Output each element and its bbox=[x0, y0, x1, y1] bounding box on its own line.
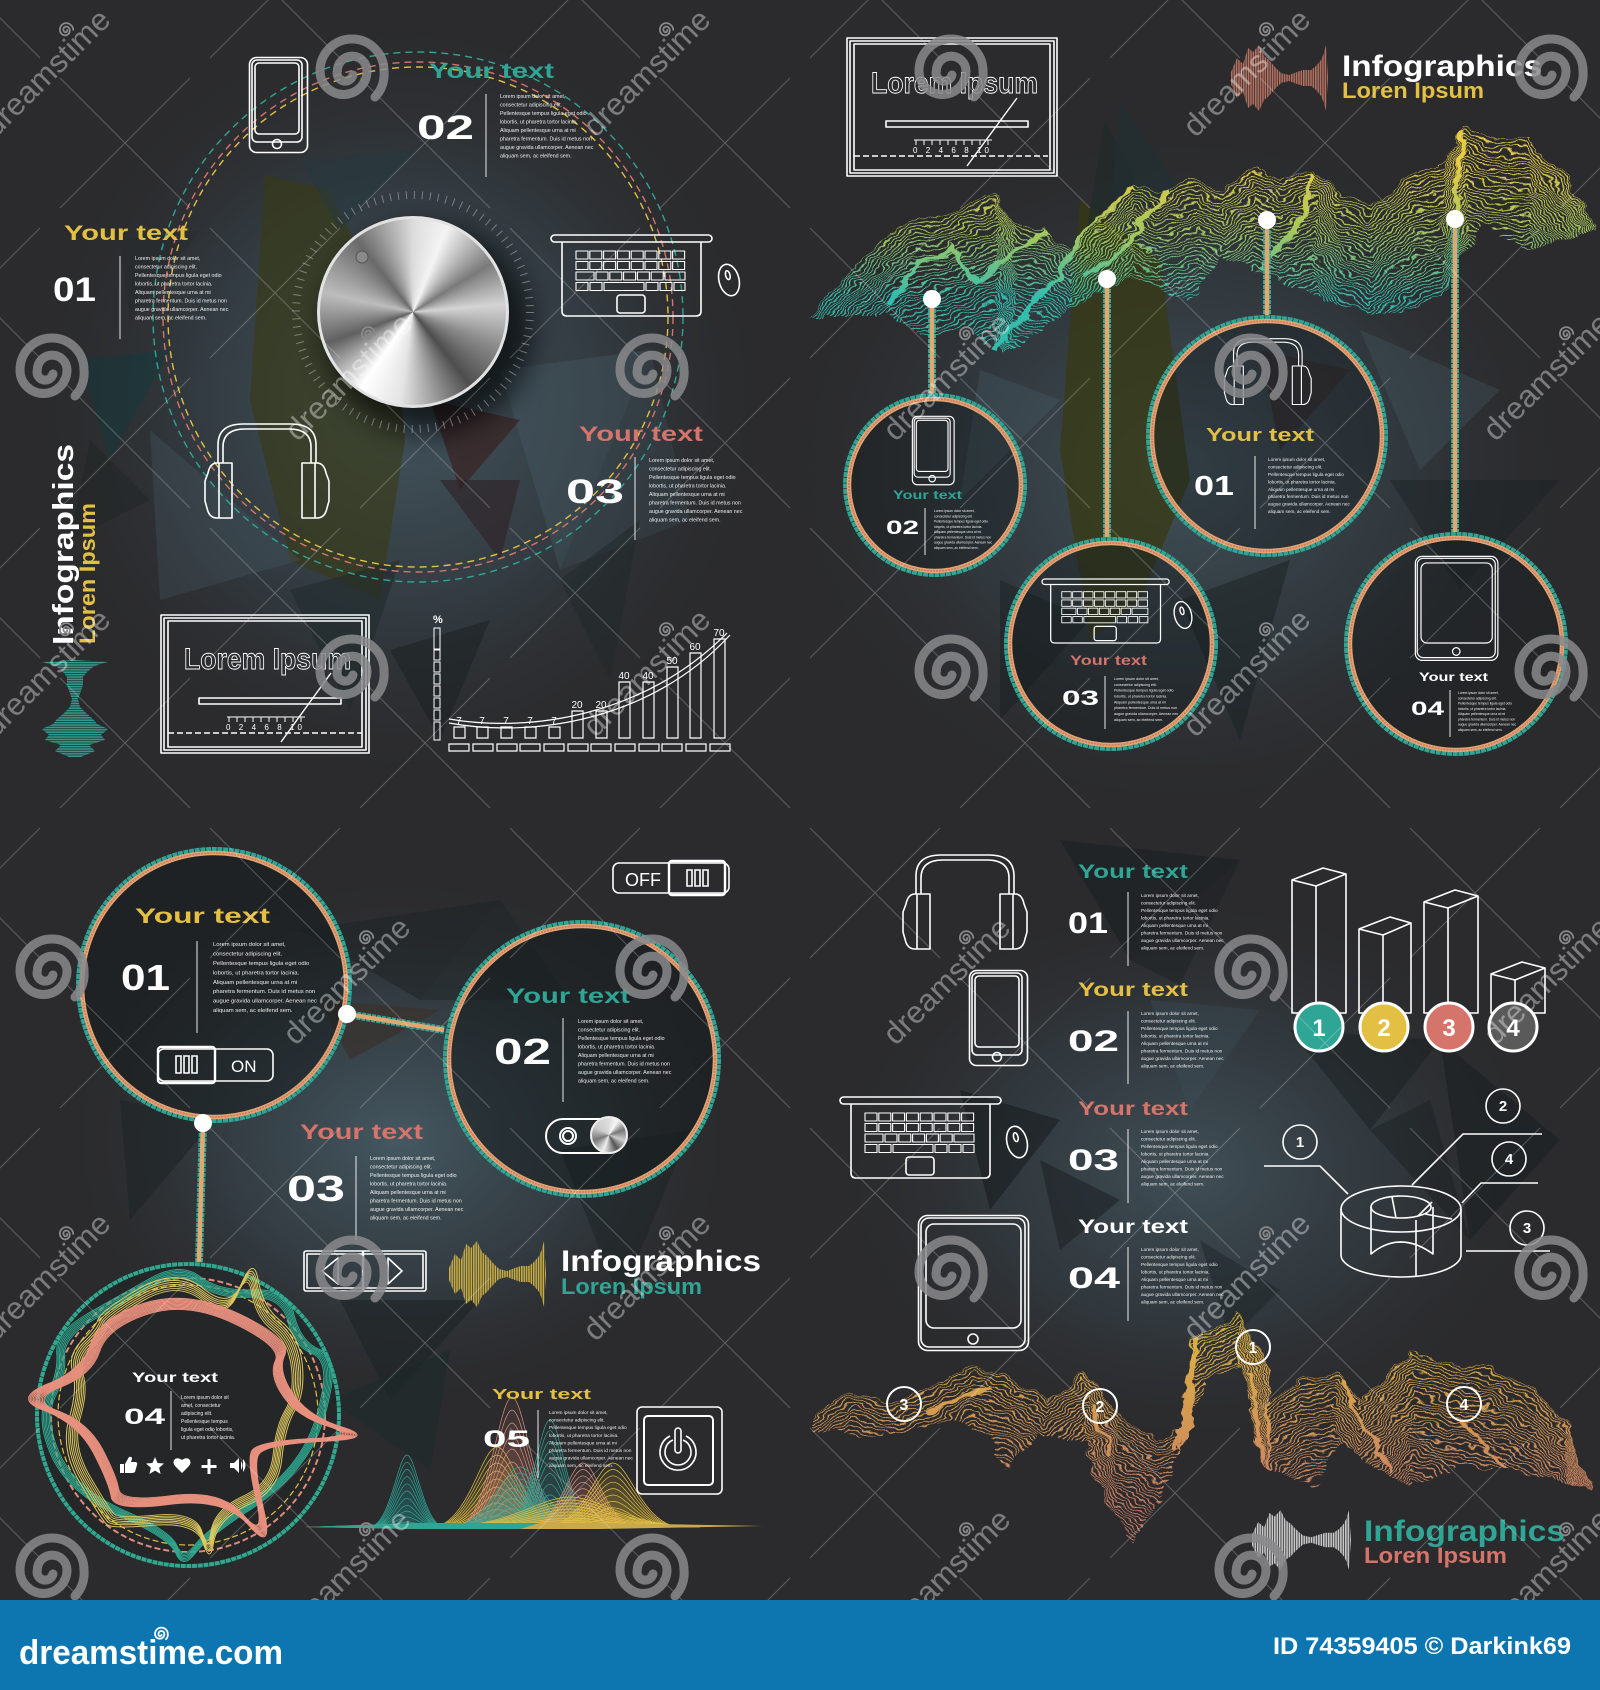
circle 02: lobortis, ut pharetra tortor lacinia. bbox=[934, 525, 982, 529]
block 03: consectetur adipiscing elit. bbox=[370, 1164, 432, 1170]
list item 01: aliquam sem, ac eleifend sem. bbox=[1141, 946, 1204, 951]
text block 02: lobortis, ut pharetra tortor lacinia. bbox=[500, 119, 577, 125]
bar chart: 7 bbox=[456, 716, 462, 727]
circle 02: augue gravida ullamcorper. Aenean nec bbox=[934, 541, 992, 545]
circle 04: 04 bbox=[1411, 699, 1445, 720]
list item 01: Lorem ipsum dolor sit amet, bbox=[1141, 893, 1199, 898]
meter box: 0 2 4 6 8 10 bbox=[226, 723, 303, 732]
list item 04: 04 bbox=[1068, 1262, 1120, 1295]
circle 01 bbox=[78, 849, 350, 1121]
title bbox=[1364, 1515, 1565, 1568]
circle 03: 03 bbox=[1062, 687, 1099, 710]
circle 03: lobortis, ut pharetra tortor lacinia. bbox=[1114, 695, 1167, 699]
list item 02: aliquam sem, ac eleifend sem. bbox=[1141, 1064, 1204, 1069]
circle 02: aliquam sem, ac eleifend sem. bbox=[934, 546, 979, 550]
text block 01: Pellentesque tempus ligula eget odio bbox=[135, 273, 222, 279]
toggle: OFF bbox=[613, 861, 729, 895]
bar chart: % bbox=[433, 614, 443, 626]
3D donut chart: 1 bbox=[1296, 1134, 1304, 1151]
circle 04 bbox=[1346, 534, 1566, 754]
list item 01: lobortis, ut pharetra tortor lacinia. bbox=[1141, 916, 1210, 921]
dashed rings bbox=[153, 52, 683, 582]
watermark text: dreamstime bbox=[876, 910, 1017, 1051]
circle 02: Lorem ipsum dolor sit amet, bbox=[934, 509, 975, 513]
wave markers: 4 bbox=[1460, 1397, 1469, 1414]
block 05: Aliquam pellentesque urna at mi bbox=[549, 1440, 617, 1446]
pins bbox=[923, 210, 1464, 308]
circle 04: Lorem ipsum dolor sit amet, bbox=[1458, 691, 1499, 695]
circle 01: 01 bbox=[1194, 470, 1234, 501]
circle 01: augue gravida ullamcorper. Aenean nec bbox=[1268, 502, 1350, 507]
connectors bbox=[932, 219, 1455, 537]
list item 03: consectetur adipiscing elit. bbox=[1141, 1137, 1196, 1142]
circle 01: 01 bbox=[121, 957, 170, 998]
icon: tablet bbox=[918, 1216, 1028, 1350]
peak chart bbox=[304, 1397, 764, 1529]
circle 02: pharetra fermentum. Duis id metus non bbox=[578, 1061, 670, 1067]
circle 04 with wave ribbon: Lorem ipsum dolor sit bbox=[181, 1395, 229, 1401]
text block 02: Lorem ipsum dolor sit amet, bbox=[500, 94, 565, 100]
list item 03: Pellentesque tempus ligula eget odio bbox=[1141, 1144, 1218, 1149]
circle 01: Aliquam pellentesque urna at mi bbox=[213, 980, 297, 986]
list item 02: Lorem ipsum dolor sit amet, bbox=[1141, 1011, 1199, 1016]
heading 01: Your text bbox=[64, 221, 188, 245]
title: Loren Ipsum bbox=[1364, 1543, 1507, 1568]
circle 04: pharetra fermentum. Duis id metus non bbox=[1458, 717, 1515, 721]
title: Infographics bbox=[1342, 50, 1542, 83]
circle 04: aliquam sem, ac eleifend sem. bbox=[1458, 728, 1503, 732]
toggle: ON bbox=[158, 1047, 273, 1083]
circle 04 with wave ribbon: Your text bbox=[132, 1370, 219, 1385]
text block 02: consectetur adipiscing elit. bbox=[500, 102, 562, 108]
list item 02: lobortis, ut pharetra tortor lacinia. bbox=[1141, 1034, 1210, 1039]
text block 03: Lorem ipsum dolor sit amet, bbox=[649, 458, 714, 464]
circle 02: pharetra fermentum. Duis id metus non bbox=[934, 535, 991, 539]
block 03: augue gravida ullamcorper. Aenean nec bbox=[370, 1207, 464, 1213]
list item 02 bbox=[1068, 980, 1224, 1084]
footer banner: dreamstime.com bbox=[19, 1634, 283, 1672]
block 03: Lorem ipsum dolor sit amet, bbox=[370, 1156, 435, 1162]
panel: top-left dial infographic bbox=[42, 52, 743, 757]
watermark text: dreamstime bbox=[276, 1502, 417, 1643]
title: Infographics bbox=[1364, 1515, 1565, 1548]
circle 02: consectetur adipiscing elit. bbox=[934, 514, 973, 518]
text block 03: Aliquam pellentesque urna at mi bbox=[649, 492, 725, 498]
connectors bbox=[199, 1014, 444, 1262]
list item 02: Your text bbox=[1078, 980, 1189, 1001]
list item 02: consectetur adipiscing elit. bbox=[1141, 1019, 1196, 1024]
toggle switch mini knob bbox=[590, 1116, 628, 1154]
list item 02: Aliquam pellentesque urna at mi bbox=[1141, 1041, 1208, 1046]
number 02: 02 bbox=[417, 109, 474, 147]
block 03: Pellentesque tempus ligula eget odio bbox=[370, 1173, 457, 1179]
list item 01: pharetra fermentum. Duis id metus non bbox=[1141, 931, 1223, 936]
text block 02: pharetra fermentum. Duis id metus non bbox=[500, 136, 592, 142]
number 01: 01 bbox=[53, 271, 96, 309]
list item 03: pharetra fermentum. Duis id metus non bbox=[1141, 1167, 1223, 1172]
bar chart: 60 bbox=[689, 642, 701, 653]
circle 02 bbox=[845, 395, 1025, 575]
bar chart: 40 bbox=[618, 671, 630, 682]
waveform: white bbox=[1252, 1510, 1351, 1570]
text block 01: pharetra fermentum. Duis id metus non bbox=[135, 298, 227, 304]
3D donut chart: 3 bbox=[1523, 1220, 1531, 1237]
waveform: coral bbox=[1231, 45, 1328, 111]
block 03: Your text bbox=[300, 1120, 423, 1144]
heading 02: Your text bbox=[429, 59, 554, 83]
meter box: Lorem Ipsum bbox=[184, 643, 351, 676]
bar chart: 70 bbox=[713, 628, 725, 639]
number 03: 03 bbox=[566, 473, 624, 511]
circle 02: Your text bbox=[506, 984, 630, 1008]
list item 01 bbox=[1068, 862, 1224, 966]
circle 03: Aliquam pellentesque urna at mi bbox=[1114, 700, 1166, 704]
text block 01: consectetur adipiscing elit. bbox=[135, 264, 197, 270]
circle 03: Lorem ipsum dolor sit amet, bbox=[1114, 677, 1159, 681]
circle 02: consectetur adipiscing elit. bbox=[578, 1027, 640, 1033]
block 05: aliquam sem, ac eleifend sem. bbox=[549, 1463, 613, 1469]
knob: brushed metal dial bbox=[317, 216, 509, 408]
circle 03 bbox=[1006, 539, 1216, 749]
circle 02: Pellentesque tempus ligula eget odio bbox=[578, 1036, 665, 1042]
circle 01: pharetra fermentum. Duis id metus non bbox=[1268, 494, 1349, 499]
circle 02: Aliquam pellentesque urna at mi bbox=[578, 1053, 654, 1059]
circle 01: Pellentesque tempus ligula eget odio bbox=[213, 961, 310, 967]
list item 04: Pellentesque tempus ligula eget odio bbox=[1141, 1262, 1218, 1267]
list item 04: lobortis, ut pharetra tortor lacinia. bbox=[1141, 1270, 1210, 1275]
circle 01: Your text bbox=[1206, 424, 1314, 445]
list item 04: Aliquam pellentesque urna at mi bbox=[1141, 1277, 1208, 1282]
icon: headphones bbox=[903, 855, 1027, 949]
circle 02: Aliquam pellentesque urna at mi bbox=[934, 530, 981, 534]
mesh wave: teal and yellow bbox=[810, 126, 1596, 352]
3D donut chart: 2 bbox=[1499, 1098, 1507, 1115]
circle 02: lobortis, ut pharetra tortor lacinia. bbox=[578, 1044, 655, 1050]
circle 01: aliquam sem, ac eleifend sem. bbox=[1268, 509, 1331, 514]
circle 02: 02 bbox=[494, 1031, 551, 1072]
panel: top-right terrain with hanging circles bbox=[800, 38, 1600, 754]
vertical title: Infographics bbox=[48, 444, 80, 645]
title: Infographics bbox=[561, 1245, 761, 1278]
list item 04: Lorem ipsum dolor sit amet, bbox=[1141, 1247, 1199, 1252]
title bbox=[561, 1245, 761, 1299]
list item 02: pharetra fermentum. Duis id metus non bbox=[1141, 1049, 1223, 1054]
text block 01: aliquam sem, ac eleifend sem. bbox=[135, 315, 207, 321]
text block 02: augue gravida ullamcorper. Aenean nec bbox=[500, 145, 594, 151]
bar chart: 20 bbox=[595, 700, 607, 711]
wave markers: 1 bbox=[1249, 1340, 1258, 1357]
circle 01: lobortis, ut pharetra tortor lacinia. bbox=[213, 970, 299, 976]
circle 03: Your text bbox=[1070, 653, 1148, 668]
title bbox=[1342, 50, 1542, 103]
meter box: Lorem Ipsum bbox=[871, 67, 1038, 100]
list item 01: Aliquam pellentesque urna at mi bbox=[1141, 923, 1208, 928]
text block 03: lobortis, ut pharetra tortor lacinia. bbox=[649, 483, 726, 489]
arrow slider bbox=[304, 1251, 426, 1291]
block 03: Aliquam pellentesque urna at mi bbox=[370, 1190, 446, 1196]
watermark text: dreamstime bbox=[276, 910, 417, 1051]
watermark text: dreamstime bbox=[876, 306, 1017, 447]
list item 03: Lorem ipsum dolor sit amet, bbox=[1141, 1129, 1199, 1134]
block 03 bbox=[287, 1120, 464, 1240]
power button bbox=[637, 1407, 722, 1494]
watermark text: dreamstime bbox=[576, 2, 717, 143]
3D donut chart bbox=[1264, 1089, 1550, 1277]
wave markers: 2 bbox=[1096, 1399, 1105, 1416]
circle 03: aliquam sem, ac eleifend sem. bbox=[1114, 718, 1163, 722]
icon: phone bbox=[250, 58, 308, 152]
circle 04 with wave ribbon: 04 bbox=[124, 1404, 166, 1429]
circle 04: augue gravida ullamcorper. Aenean nec bbox=[1458, 723, 1516, 727]
circle 01: Aliquam pellentesque urna at mi bbox=[1268, 487, 1334, 492]
list item 03: Your text bbox=[1078, 1099, 1189, 1120]
circle 04 with wave ribbon: adipiscing elit. bbox=[181, 1411, 212, 1417]
circle 01: aliquam sem, ac eleifend sem. bbox=[213, 1008, 293, 1014]
block 05: lobortis, ut pharetra tortor lacinia. bbox=[549, 1433, 618, 1439]
panel: bottom-left connected circles bbox=[29, 849, 764, 1566]
3D bar chart bbox=[1292, 868, 1545, 1051]
circle 01: augue gravida ullamcorper. Aenean nec bbox=[213, 999, 317, 1005]
block 05: augue gravida ullamcorper. Aenean nec bbox=[549, 1456, 633, 1462]
circle 02: augue gravida ullamcorper. Aenean nec bbox=[578, 1070, 672, 1076]
list item 03: Aliquam pellentesque urna at mi bbox=[1141, 1159, 1208, 1164]
meter box: 0 2 4 6 8 10 bbox=[913, 146, 990, 155]
circle 04: Pellentesque tempus ligula eget odio bbox=[1458, 702, 1512, 706]
watermark text: dreamstime bbox=[576, 602, 717, 743]
circle 04 with wave ribbon bbox=[29, 1264, 357, 1566]
watermark text: dreamstime bbox=[1176, 2, 1317, 143]
text block 03: aliquam sem, ac eleifend sem. bbox=[649, 517, 721, 523]
pins bbox=[194, 1005, 356, 1132]
icon: laptop bbox=[840, 1097, 1001, 1178]
list item 04: pharetra fermentum. Duis id metus non bbox=[1141, 1285, 1223, 1290]
list item 03 bbox=[1068, 1099, 1224, 1203]
circle 02: Pellentesque tempus ligula eget odio bbox=[934, 520, 988, 524]
list item 02: Pellentesque tempus ligula eget odio bbox=[1141, 1026, 1218, 1031]
meter box bbox=[847, 38, 1057, 176]
text block 01: augue gravida ullamcorper. Aenean nec bbox=[135, 307, 229, 313]
bar chart: 7 bbox=[479, 716, 485, 727]
list item 01: 01 bbox=[1068, 907, 1108, 940]
circle 03: Pellentesque tempus ligula eget odio bbox=[1114, 689, 1174, 693]
circle 04 with wave ribbon: Pellentesque tempus bbox=[181, 1419, 228, 1425]
circle 02 bbox=[445, 922, 719, 1196]
list item 03: augue gravida ullamcorper. Aenean nec bbox=[1141, 1174, 1224, 1179]
circle 04: Your text bbox=[1419, 670, 1488, 684]
block 05: Lorem ipsum dolor sit amet, bbox=[549, 1410, 608, 1416]
text block 03: augue gravida ullamcorper. Aenean nec bbox=[649, 509, 743, 515]
circle 02: aliquam sem, ac eleifend sem. bbox=[578, 1078, 650, 1084]
vertical title bbox=[48, 444, 100, 645]
block 03: 03 bbox=[287, 1168, 345, 1209]
icon: phone bbox=[970, 970, 1028, 1066]
watermark text: dreamstime bbox=[278, 306, 419, 447]
toggle: slider bbox=[546, 1119, 626, 1153]
3D donut chart: 4 bbox=[1505, 1151, 1514, 1168]
footer banner: ID 74359405 © Darkink69 bbox=[1273, 1633, 1571, 1660]
circle 04: consectetur adipiscing elit. bbox=[1458, 696, 1497, 700]
wave markers bbox=[887, 1330, 1481, 1423]
title: Loren Ipsum bbox=[561, 1274, 702, 1299]
icon: mouse bbox=[1003, 1124, 1031, 1160]
text block 02: Pellentesque tempus ligula eget odio bbox=[500, 111, 587, 117]
text block 03: Pellentesque tempus ligula eget odio bbox=[649, 475, 736, 481]
circle 04: Aliquam pellentesque urna at mi bbox=[1458, 712, 1505, 716]
watermark text: dreamstime bbox=[1176, 1206, 1317, 1347]
toggle: OFF: OFF bbox=[625, 870, 661, 890]
watermark text: dreamstime bbox=[1176, 602, 1317, 743]
circle 01: Your text bbox=[135, 904, 270, 928]
icon row bbox=[120, 1457, 246, 1474]
list item 02: 02 bbox=[1068, 1025, 1119, 1058]
3D bar chart: 2 bbox=[1377, 1015, 1391, 1042]
block 03: lobortis, ut pharetra tortor lacinia. bbox=[370, 1181, 447, 1187]
list item 02: augue gravida ullamcorper. Aenean nec bbox=[1141, 1056, 1224, 1061]
circle 02: Lorem ipsum dolor sit amet, bbox=[578, 1019, 643, 1025]
circle 01: Lorem ipsum dolor sit amet, bbox=[213, 942, 286, 948]
block 03: pharetra fermentum. Duis id metus non bbox=[370, 1198, 462, 1204]
circle 02: Your text bbox=[893, 488, 962, 502]
circle 04 with wave ribbon: ligula eget odio lobortis, bbox=[181, 1427, 234, 1433]
circle 01: Pellentesque tempus ligula eget odio bbox=[1268, 472, 1344, 477]
icon: mouse bbox=[715, 262, 743, 298]
list item 01: consectetur adipiscing elit. bbox=[1141, 901, 1196, 906]
bar chart bbox=[433, 614, 730, 751]
circle 01: consectetur adipiscing elit. bbox=[213, 951, 282, 957]
list item 01: augue gravida ullamcorper. Aenean nec bbox=[1141, 938, 1224, 943]
list item 03: aliquam sem, ac eleifend sem. bbox=[1141, 1182, 1204, 1187]
text block 01: lobortis, ut pharetra tortor lacinia. bbox=[135, 281, 212, 287]
list item 03: lobortis, ut pharetra tortor lacinia. bbox=[1141, 1152, 1210, 1157]
text block 03: consectetur adipiscing elit. bbox=[649, 466, 711, 472]
panel: bottom-right list and charts bbox=[800, 855, 1600, 1570]
list item 04 bbox=[1068, 1217, 1224, 1321]
block 05 bbox=[483, 1386, 633, 1478]
circle 04: lobortis, ut pharetra tortor lacinia. bbox=[1458, 707, 1506, 711]
text block 02: aliquam sem, ac eleifend sem. bbox=[500, 153, 572, 159]
list item 04: Your text bbox=[1078, 1217, 1189, 1238]
toggle: ON: ON bbox=[231, 1057, 256, 1076]
text block 01: Lorem ipsum dolor sit amet, bbox=[135, 256, 200, 262]
circle 01: consectetur adipiscing elit. bbox=[1268, 464, 1322, 469]
3D bar chart: 4 bbox=[1506, 1015, 1520, 1042]
meter box bbox=[161, 615, 369, 753]
list item 01: Pellentesque tempus ligula eget odio bbox=[1141, 908, 1218, 913]
3D bar chart: 1 bbox=[1312, 1015, 1326, 1042]
watermark text: dreamstime bbox=[576, 1206, 717, 1347]
list item 04: consectetur adipiscing elit. bbox=[1141, 1255, 1196, 1260]
block 05: 05 bbox=[483, 1426, 530, 1453]
list item 04: augue gravida ullamcorper. Aenean nec bbox=[1141, 1292, 1224, 1297]
vertical waveform bbox=[42, 660, 108, 757]
footer banner bbox=[0, 1600, 1600, 1690]
circle 04 with wave ribbon: ut pharetra tortor lacinia. bbox=[181, 1435, 235, 1441]
circle 01: pharetra fermentum. Duis id metus non bbox=[213, 989, 315, 995]
bar chart: 7 bbox=[503, 716, 509, 727]
list item 04: aliquam sem, ac eleifend sem. bbox=[1141, 1300, 1204, 1305]
3D bar chart: 3 bbox=[1442, 1015, 1456, 1042]
knob marker bbox=[356, 251, 368, 263]
block 03: aliquam sem, ac eleifend sem. bbox=[370, 1215, 442, 1221]
circle 01: Lorem ipsum dolor sit amet, bbox=[1268, 457, 1325, 462]
mesh wave: orange bbox=[812, 1311, 1594, 1543]
icon: headphones bbox=[205, 424, 329, 518]
text block 01: Aliquam pellentesque urna at mi bbox=[135, 290, 211, 296]
block 05: Pellentesque tempus ligula eget odio bbox=[549, 1425, 627, 1431]
waveform: yellow bbox=[449, 1241, 546, 1307]
circle 04 with wave ribbon: amet, consectetur bbox=[181, 1403, 221, 1409]
list item 01: Your text bbox=[1078, 862, 1189, 883]
icon: laptop bbox=[551, 235, 712, 316]
circle 02: 02 bbox=[886, 518, 919, 539]
dial ticks bbox=[296, 195, 530, 429]
text block 02: Aliquam pellentesque urna at mi bbox=[500, 128, 576, 134]
circle 03: pharetra fermentum. Duis id metus non bbox=[1114, 706, 1177, 710]
circle 03: augue gravida ullamcorper. Aenean nec bbox=[1114, 712, 1178, 716]
bar chart: 7 bbox=[551, 716, 557, 727]
text block 03: pharetra fermentum. Duis id metus non bbox=[649, 500, 741, 506]
heading 03: Your text bbox=[579, 422, 703, 446]
circle 01 bbox=[1148, 317, 1386, 555]
circle 01: lobortis, ut pharetra tortor lacinia. bbox=[1268, 479, 1336, 484]
bar chart: 50 bbox=[666, 656, 678, 667]
bar chart: 40 bbox=[642, 671, 654, 682]
vertical title: Loren Ipsum bbox=[75, 503, 100, 644]
list item 03: 03 bbox=[1068, 1144, 1119, 1177]
title: Loren Ipsum bbox=[1342, 78, 1484, 103]
bar chart: 7 bbox=[527, 716, 533, 727]
circle 03: consectetur adipiscing elit. bbox=[1114, 683, 1157, 687]
block 05: pharetra fermentum. Duis id metus non bbox=[549, 1448, 632, 1454]
block 05: consectetur adipiscing elit. bbox=[549, 1418, 605, 1424]
block 05: Your text bbox=[492, 1386, 591, 1403]
wave markers: 3 bbox=[900, 1397, 909, 1414]
watermark text: dreamstime bbox=[876, 1502, 1017, 1643]
bar chart: 20 bbox=[571, 700, 583, 711]
